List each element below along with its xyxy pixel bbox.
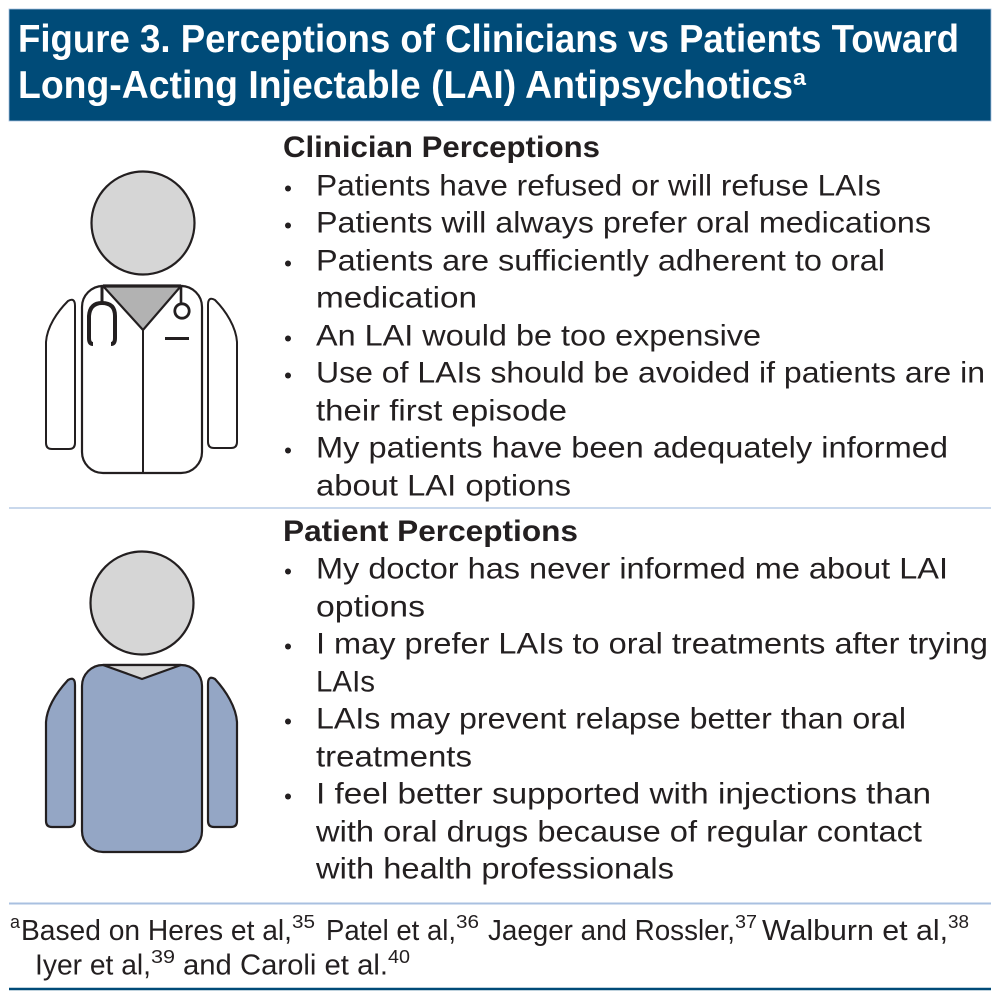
list: clinician perception bullets: Use of LAIs should be avoided if patients are in [316,356,985,390]
footnote: a [10,911,21,932]
title banner: a [793,65,807,90]
footnote: 40 [388,946,410,967]
title banner: Figure 3. Perceptions of Clinicians vs Patients Toward [18,18,959,61]
list: clinician perception bullets: Patients have refused or will refuse LAIs [316,170,881,202]
footnote: 38 [948,911,969,932]
list: clinician perception bullets: their first episode [316,394,567,428]
footnote [10,911,969,982]
list: clinician perception bullets: My patients have been adequately informed [316,432,948,464]
footnote: Patel et al, [326,915,456,947]
list: patient perception bullets: with health professionals [315,852,674,886]
list: patient perception bullets: I feel better supported with injections than [316,778,931,810]
list: patient perception bullets: options [316,590,425,624]
icon: patient figure [46,552,237,852]
list: clinician perception bullets: An LAI would be too expensive [316,320,761,352]
heading: clinician perceptions: Clinician Perceptions [283,131,600,164]
list: clinician perception bullets: medication [316,282,477,314]
list: patient perception bullets: My doctor has never informed me about LAI [316,552,948,586]
footnote: 39 [151,946,175,967]
list: clinician perception bullets: Patients are sufficiently adherent to oral [316,244,885,278]
list: patient perception bullets: LAIs may prevent relapse better than oral [316,702,906,736]
footnote: Jaeger and Rossler, [488,915,735,947]
panel: patient perceptions [283,515,988,886]
footnote: 35 [292,911,315,932]
footnote: 37 [735,911,757,932]
heading: patient perceptions: Patient Perceptions [283,515,578,548]
list: clinician perception bullets [285,170,985,502]
footnote: Walburn et al, [762,915,948,947]
title banner [9,9,991,121]
footnote: and Caroli et al. [183,950,388,982]
list: patient perception bullets: I may prefer LAIs to oral treatments after trying [316,628,988,660]
footnote: Iyer et al, [35,950,151,982]
list: clinician perception bullets: about LAI options [316,470,571,502]
list: patient perception bullets: treatments [316,740,472,774]
title banner: Long-Acting Injectable (LAI) Antipsychotics [18,64,793,107]
list: clinician perception bullets: Patients will always prefer oral medications [316,206,931,240]
list: patient perception bullets: LAIs [316,666,375,698]
panel: clinician perceptions [283,131,985,502]
list: patient perception bullets [285,552,988,886]
footnote: Based on Heres et al, [21,915,292,947]
list: patient perception bullets: with oral drugs because of regular contact [315,816,923,848]
icon: clinician figure [46,172,237,473]
footnote: 36 [456,911,479,932]
